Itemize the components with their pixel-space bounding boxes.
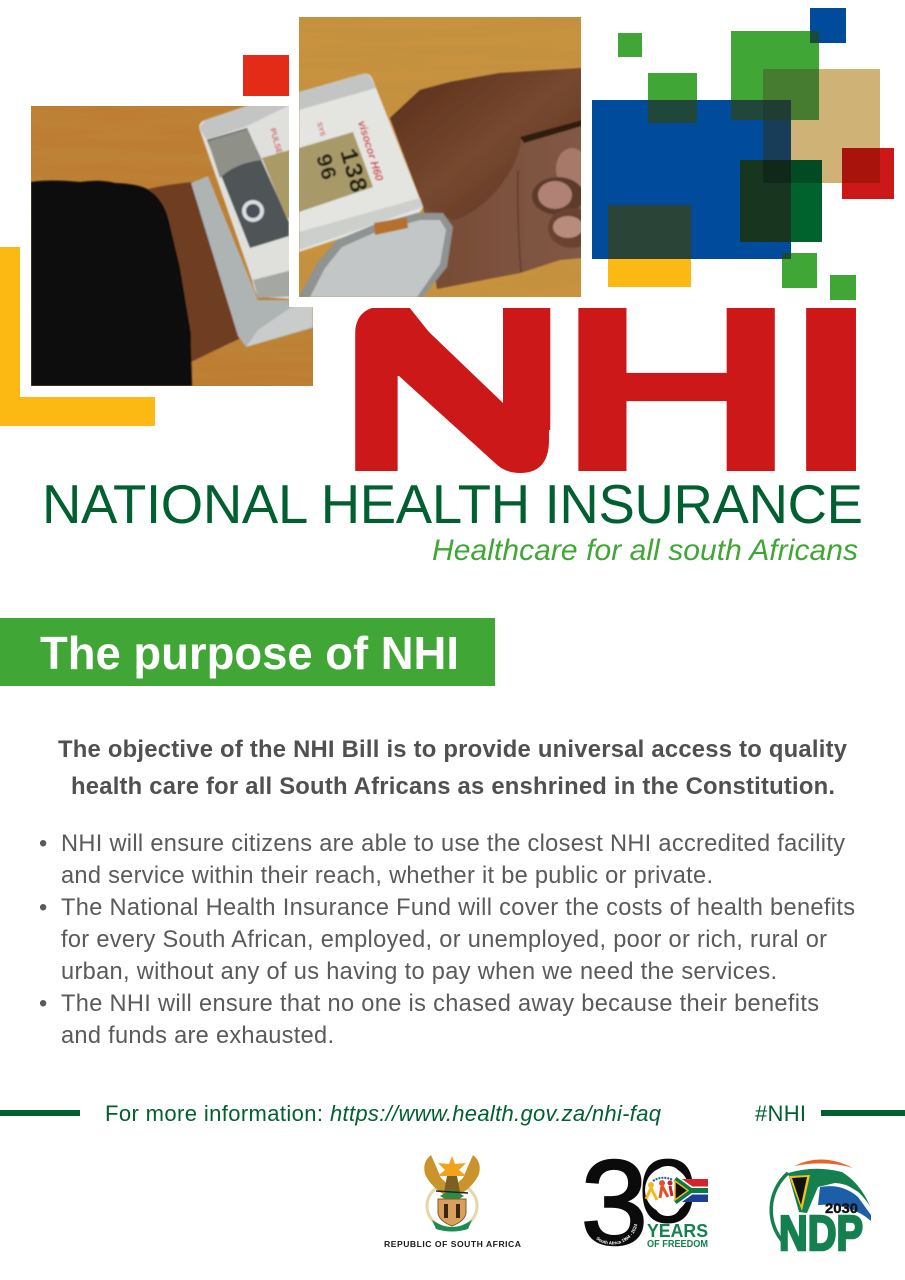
LCD display <box>299 132 373 212</box>
bullet 3: and funds are exhausted. <box>61 1023 334 1049</box>
bullet 1: and service within their reach, whether it be public or private. <box>61 863 713 889</box>
bullet 1: NHI will ensure citizens are able to use the closest NHI accredited facility <box>61 831 845 857</box>
red block <box>842 148 894 199</box>
button <box>242 200 264 222</box>
white frame around upper photo <box>289 17 581 307</box>
inner white circle <box>645 1167 689 1213</box>
objective statement: health care for all South Africans as enshrined in the Constitution. <box>71 773 835 800</box>
fist and thumb <box>390 68 582 220</box>
numerals: 3 <box>581 1136 648 1270</box>
footer information line: https://www.health.gov.za/nhi-faq <box>330 1101 662 1126</box>
NHI logotype: H <box>556 257 797 522</box>
logo: 30 years of freedom: South Africa 1994 - 2024 <box>596 1224 638 1245</box>
people figures <box>646 1178 673 1200</box>
large blue block <box>592 100 791 259</box>
spear and knobkierie <box>436 1191 468 1193</box>
NHI logotype: N <box>333 257 573 522</box>
logo: 30 years of freedom <box>581 1136 708 1270</box>
photo: blood pressure monitor on wrist, left half <box>31 88 313 386</box>
photo: blood pressure monitor on wrist, right half: 96 <box>309 151 341 183</box>
section banner <box>0 618 495 686</box>
of freedom label: OF FREEDOM <box>647 1239 708 1250</box>
fingers <box>556 148 581 187</box>
display panel <box>207 128 289 248</box>
bullet 1: • <box>39 831 47 857</box>
photo: blood pressure monitor on wrist, left half: PULSE <box>268 127 284 156</box>
2030 label: 2030 <box>825 1200 858 1216</box>
NHI logotype <box>333 257 879 522</box>
bullet 3: • <box>39 991 47 1017</box>
objective statement: The objective of the NHI Bill is to provide universal access to quality <box>58 736 848 763</box>
yellow block <box>608 205 691 287</box>
hand <box>422 126 581 290</box>
cuff tab <box>374 217 408 235</box>
monitor body <box>299 74 423 252</box>
bullet 2 <box>39 895 855 985</box>
wings <box>424 1155 450 1196</box>
logo: NDP 2030 <box>771 1159 871 1261</box>
bullet 2: urban, without any of us having to pay when we need the services. <box>61 959 777 985</box>
tagline: Healthcare for all south Africans <box>432 534 858 567</box>
banner heading: The purpose of NHI <box>40 627 459 679</box>
footer information line <box>0 1101 905 1126</box>
colour block cluster <box>592 8 894 300</box>
bullet list <box>39 831 855 1049</box>
cuff <box>299 213 453 297</box>
yellow and black triangle <box>789 1175 810 1211</box>
motto ribbon <box>432 1220 472 1232</box>
forearm <box>148 182 241 386</box>
bird body <box>444 1176 460 1192</box>
photo: blood pressure monitor on wrist, right half <box>299 17 596 297</box>
green ring <box>771 1173 788 1243</box>
years label: YEARS <box>647 1221 708 1241</box>
green sweep <box>788 1169 870 1213</box>
title: National Health Insurance: NATIONAL HEALTH INSURANCE <box>42 474 863 535</box>
small green square <box>618 33 642 57</box>
bullet 3 <box>39 991 819 1049</box>
bullet 2: • <box>39 895 47 921</box>
South African flag <box>675 1179 708 1202</box>
logo caption: REPUBLIC OF SOUTH AFRICA <box>384 1239 521 1249</box>
decorative red square <box>243 55 289 96</box>
bullet 3: The NHI will ensure that no one is chased away because their benefits <box>61 991 819 1017</box>
orange arc <box>794 1159 853 1168</box>
NDP label: NDP <box>779 1207 863 1261</box>
sleeve <box>31 180 192 386</box>
decorative yellow L bracket <box>0 247 155 426</box>
shield <box>438 1199 466 1226</box>
objective statement <box>58 736 848 800</box>
large green block <box>731 31 819 120</box>
tan block <box>763 69 880 183</box>
footer information line: For more information: <box>105 1101 323 1126</box>
anniversary arc text <box>596 1211 638 1245</box>
monitor body <box>198 106 289 300</box>
footer information line: #NHI <box>755 1101 806 1126</box>
NHI logotype: I <box>783 257 879 521</box>
photo: blood pressure monitor on wrist, right half: SYS <box>315 122 326 137</box>
bullet 2: The National Health Insurance Fund will cover the costs of health benefits <box>61 895 855 921</box>
cuff strap <box>191 176 313 347</box>
wheat ring <box>427 1183 477 1229</box>
logo: 30 years of freedom: 0 <box>639 1140 697 1241</box>
mid green square <box>648 73 697 123</box>
bullet 2: for every South African, employed, or unemployed, poor or rich, rural or <box>61 927 827 953</box>
palm crease <box>518 170 521 272</box>
top blue square <box>810 8 846 43</box>
bullet 1 <box>39 831 845 889</box>
dark green block <box>740 160 822 242</box>
protea leaves <box>440 1189 464 1203</box>
logo: coat of arms of South Africa <box>424 1155 480 1232</box>
blue sweep <box>818 1186 871 1221</box>
reading digits: 138 <box>332 145 373 196</box>
green squares bottom <box>782 253 817 288</box>
sun <box>438 1156 466 1176</box>
brand label: visocor H60 <box>355 119 385 183</box>
